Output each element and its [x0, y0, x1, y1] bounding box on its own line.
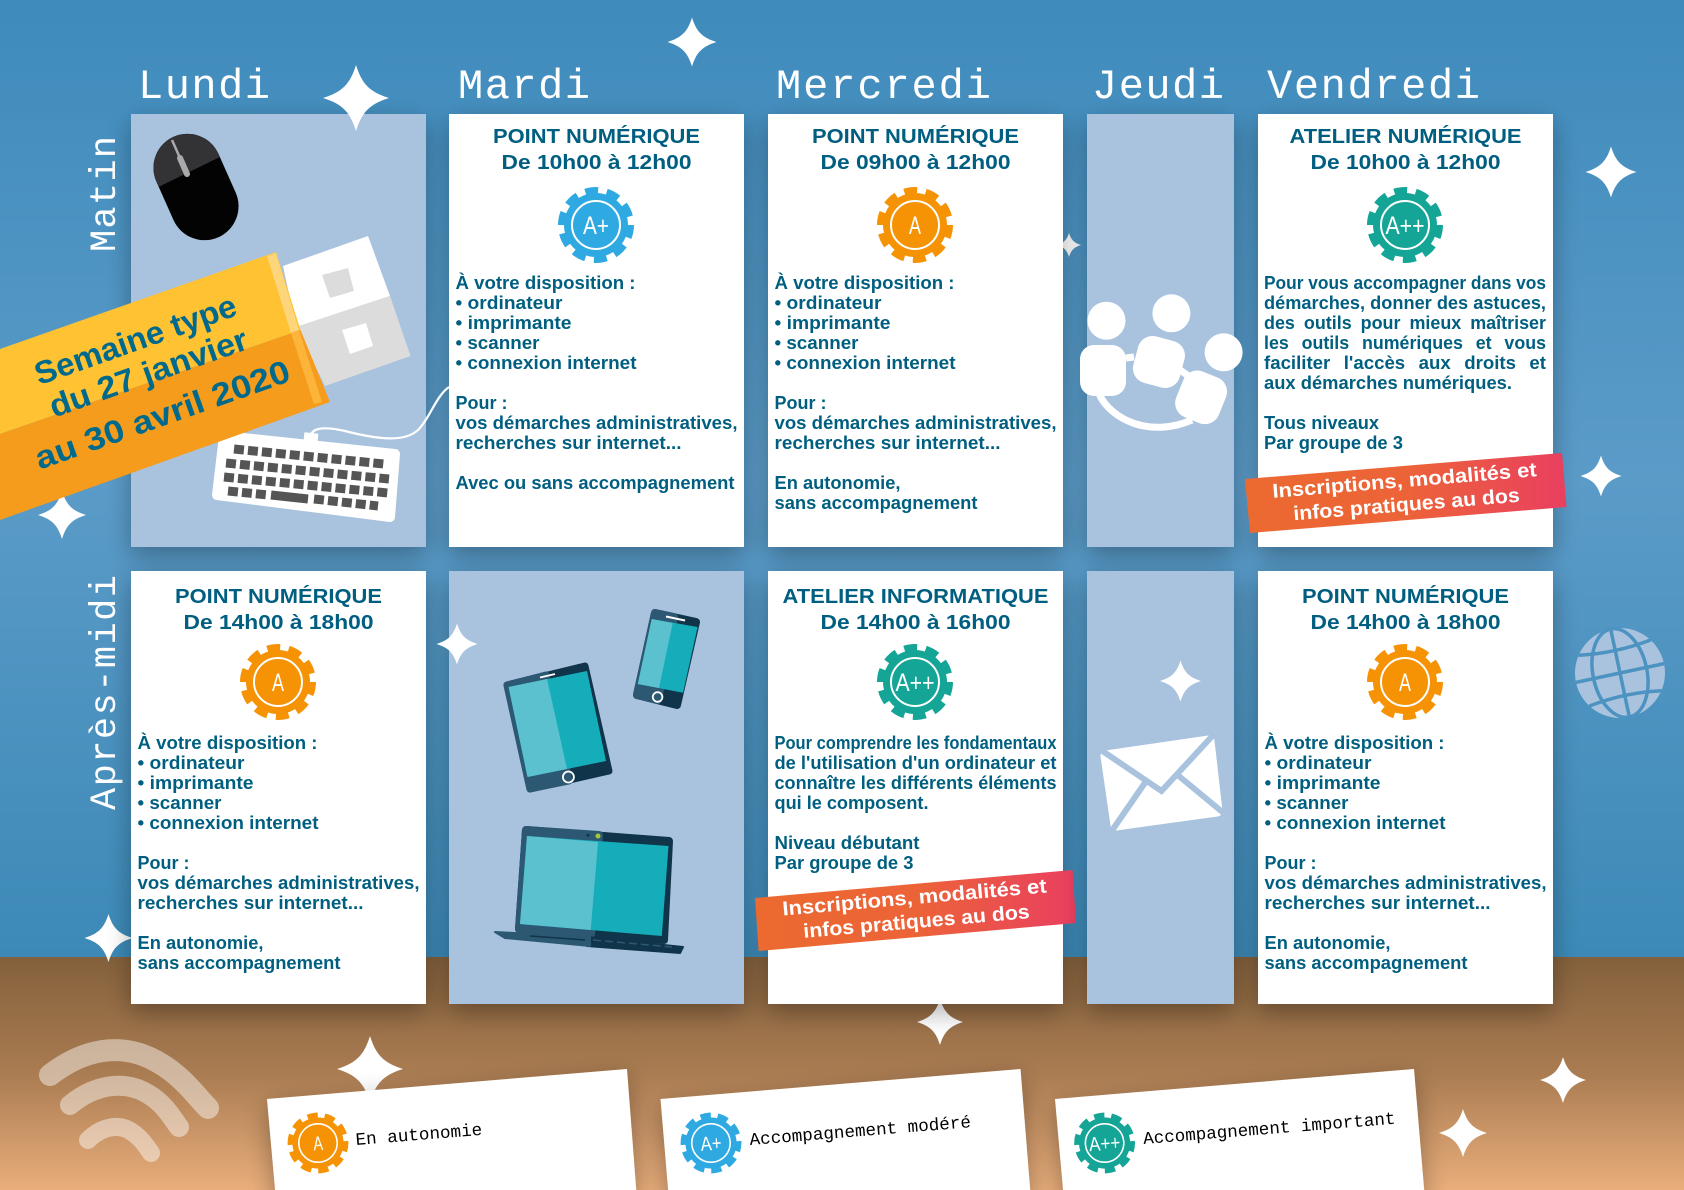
icon: gear A	[244, 648, 312, 716]
panel: Mercredi morning: POINT NUMÉRIQUE	[812, 125, 1019, 148]
panel: Vendredi afternoon	[1258, 571, 1553, 1004]
icon: gear A: A	[313, 1133, 324, 1156]
callout: Vendredi registration ribbon	[1245, 453, 1566, 533]
panel: Vendredi morning: aux démarches numériques.	[1264, 373, 1512, 393]
panel: Mardi morning: À votre disposition :	[456, 272, 636, 293]
panel: Vendredi afternoon: Pour :	[1264, 853, 1316, 873]
panel: Vendredi afternoon: POINT NUMÉRIQUE	[1302, 585, 1509, 608]
panel: Vendredi afternoon: recherches sur internet...	[1264, 893, 1490, 913]
panel: Mardi morning: POINT NUMÉRIQUE	[493, 125, 700, 148]
panel: Mercredi afternoon: De 14h00 à 16h00	[820, 611, 1010, 634]
panel: Mercredi morning: vos démarches administratives,	[774, 413, 1056, 433]
panel: Lundi afternoon: Pour :	[138, 853, 190, 873]
panel: Mercredi afternoon: connaître les différents éléments	[774, 773, 1056, 793]
panel: Lundi afternoon	[131, 571, 426, 1004]
callout: Mercredi registration ribbon: infos pratiques au dos	[802, 901, 1031, 943]
panel: Jeudi afternoon	[1087, 571, 1234, 1004]
panel: Lundi afternoon: • scanner	[138, 793, 222, 813]
icon: gear A+	[562, 191, 630, 259]
panel: Mardi morning: recherches sur internet...	[456, 433, 682, 453]
panel: Lundi afternoon: POINT NUMÉRIQUE	[175, 585, 382, 608]
panel: Lundi afternoon: De 14h00 à 18h00	[184, 611, 374, 634]
title banner: Semaine type: Semaine type	[29, 287, 241, 392]
panel: Lundi afternoon: • ordinateur	[138, 753, 244, 773]
icon: gear A++	[1371, 191, 1439, 259]
callout: Vendredi registration ribbon: infos pratiques au dos	[1292, 485, 1521, 525]
icon: globe	[1567, 620, 1673, 726]
title banner: Semaine type: au 30 avril 2020	[30, 353, 295, 476]
panel: Mercredi morning: Pour :	[774, 393, 826, 413]
panel: Vendredi afternoon: • imprimante	[1264, 773, 1380, 793]
panel: Vendredi morning: Par groupe de 3	[1264, 433, 1403, 453]
panel: Mardi morning: • ordinateur	[456, 293, 562, 313]
panel: Mardi morning: Pour :	[456, 393, 508, 413]
panel: Mardi morning: • scanner	[456, 333, 540, 353]
panel: Lundi afternoon: • imprimante	[138, 773, 254, 793]
panel: Mercredi morning: • connexion internet	[774, 353, 956, 373]
panel: Mercredi afternoon	[768, 571, 1063, 1004]
panel: Mardi morning: • connexion internet	[456, 353, 636, 373]
panel: Vendredi afternoon: • connexion internet	[1264, 813, 1446, 833]
panel: Vendredi morning: Tous niveaux	[1264, 413, 1379, 433]
panel: Mercredi afternoon: Pour comprendre les fondamentaux	[774, 733, 1056, 753]
panel: Vendredi afternoon: vos démarches administratives,	[1264, 873, 1546, 893]
callout: Mercredi registration ribbon: Inscriptions, modalités et	[782, 875, 1048, 921]
heading: days of the week: Vendredi	[1267, 63, 1480, 111]
star desk far right	[1439, 1109, 1487, 1157]
star over Jeudi panel	[1160, 660, 1201, 702]
icon: keyboard	[217, 387, 449, 517]
callout: Vendredi registration ribbon: Inscriptions, modalités et	[1272, 459, 1538, 503]
icon: gear A++: A++	[896, 669, 934, 697]
icon: gear A	[881, 191, 949, 259]
panel: Jeudi morning	[1087, 114, 1234, 547]
legend card: Accompagnement modéré: Accompagnement modéré	[749, 1113, 972, 1151]
heading: Matin: Matin	[85, 136, 127, 252]
heading: days of the week: Lundi	[138, 63, 270, 111]
panel: Mercredi morning: • scanner	[774, 333, 858, 353]
panel: Vendredi morning	[1258, 114, 1553, 547]
star left lower	[84, 914, 132, 962]
callout: Mercredi registration ribbon	[755, 870, 1076, 951]
panel: Mercredi afternoon: de l'utilisation d'un ordinateur et	[774, 753, 1056, 773]
panel: Lundi afternoon: En autonomie,	[138, 933, 264, 953]
icon: USB stick connector	[283, 236, 410, 386]
icon: laptop	[495, 830, 683, 953]
panel: Mercredi afternoon: qui le composent.	[774, 793, 928, 813]
star over Lundi panel	[323, 65, 389, 131]
legend card: Accompagnement important: Accompagnement important	[1142, 1110, 1396, 1150]
icon: gear A	[289, 1114, 347, 1172]
icon: gear A++: A++	[1386, 212, 1424, 240]
star left banner	[38, 491, 86, 539]
icon: gear A: A	[272, 669, 284, 697]
panel: Mardi afternoon with devices	[449, 571, 744, 1004]
star right middle	[1580, 456, 1622, 496]
panel: Mercredi morning: recherches sur internet...	[774, 433, 1000, 453]
heading: days of the week: Jeudi	[1092, 63, 1224, 111]
legend card: En autonomie	[267, 1069, 637, 1190]
panel: Lundi afternoon: vos démarches administratives,	[138, 873, 420, 893]
panel: Mardi morning: vos démarches administratives,	[456, 413, 738, 433]
heading: Après-midi: Après-midi	[85, 575, 127, 810]
panel: Mardi morning: De 10h00 à 12h00	[502, 151, 692, 174]
panel: Mardi morning: Avec ou sans accompagnement	[456, 473, 734, 493]
panel: Mercredi afternoon: Niveau débutant	[774, 833, 920, 853]
panel: Vendredi morning: démarches, donner des astuces,	[1264, 293, 1546, 313]
heading: days of the week	[138, 63, 1480, 111]
panel: Mardi morning	[449, 114, 744, 547]
legend card: Accompagnement modéré	[660, 1069, 1031, 1190]
icon: tablet	[507, 666, 609, 789]
panel: Mercredi morning: En autonomie,	[774, 473, 900, 493]
panel: Lundi afternoon: À votre disposition :	[138, 732, 318, 753]
icon: gear A++: A++	[1088, 1132, 1121, 1156]
background: brown desk	[0, 957, 1684, 1190]
star desk centre	[917, 999, 963, 1045]
icon: gear A++	[1076, 1114, 1134, 1172]
panel: Mercredi morning: sans accompagnement	[774, 493, 978, 513]
panel: Mercredi morning: De 09h00 à 12h00	[820, 151, 1010, 174]
star small between columns	[1057, 233, 1081, 257]
heading: days of the week: Mardi	[458, 63, 590, 111]
icon: smartphone	[637, 613, 698, 705]
panel: Vendredi afternoon: • ordinateur	[1264, 753, 1372, 773]
star desk left	[337, 1036, 403, 1102]
panel: Mercredi morning: • imprimante	[774, 313, 890, 333]
icon: wifi waves	[50, 1050, 208, 1153]
panel: Mercredi morning	[768, 114, 1063, 547]
icon: gear A+: A+	[700, 1132, 722, 1156]
panel: Vendredi morning: les outils numériques et vous	[1264, 333, 1546, 353]
star over Mardi panel	[436, 624, 478, 664]
panel: Lundi afternoon: sans accompagnement	[138, 953, 340, 973]
star right upper	[1586, 146, 1636, 198]
panel: Mercredi afternoon: Par groupe de 3	[774, 853, 914, 873]
heading: days of the week: Mercredi	[776, 63, 991, 111]
panel: Vendredi afternoon: • scanner	[1264, 793, 1348, 813]
icon: gear A: A	[909, 212, 921, 240]
panel: Vendredi afternoon: sans accompagnement	[1264, 953, 1468, 973]
panel: Vendredi afternoon: À votre disposition :	[1264, 732, 1444, 753]
panel: Vendredi morning: des outils pour mieux maîtriser	[1264, 313, 1546, 333]
icon: computer mouse	[153, 134, 239, 240]
title banner: Semaine type	[0, 252, 330, 520]
icon: gear A	[1371, 648, 1439, 716]
panel: Vendredi morning: faciliter l'accès aux droits et	[1264, 353, 1546, 373]
icon: gear A++	[881, 648, 949, 716]
icon: gear A+	[682, 1114, 740, 1172]
icon: gear A+: A+	[583, 212, 609, 240]
star top	[668, 18, 716, 66]
panel: Vendredi morning: De 10h00 à 12h00	[1310, 151, 1500, 174]
icon: envelope	[1098, 732, 1226, 832]
star desk right	[1540, 1057, 1586, 1103]
panel: Lundi afternoon: recherches sur internet...	[138, 893, 364, 913]
panel: Mardi morning: • imprimante	[456, 313, 572, 333]
panel: Lundi afternoon: • connexion internet	[138, 813, 318, 833]
panel: Mercredi morning: • ordinateur	[774, 293, 882, 313]
legend card: Accompagnement important	[1055, 1069, 1425, 1190]
title banner: Semaine type: du 27 janvier	[44, 321, 252, 424]
legend card: En autonomie: En autonomie	[355, 1121, 483, 1151]
icon: gear A: A	[1399, 669, 1411, 697]
panel: Vendredi afternoon: En autonomie,	[1264, 933, 1390, 953]
panel: Mercredi afternoon: ATELIER INFORMATIQUE	[782, 585, 1048, 608]
panel: Vendredi afternoon: De 14h00 à 18h00	[1310, 611, 1500, 634]
icon: group of people	[1080, 294, 1243, 429]
panel: Lundi morning background	[131, 114, 426, 547]
panel: Mercredi morning: À votre disposition :	[774, 272, 954, 293]
panel: Vendredi morning: Pour vous accompagner dans vos	[1264, 273, 1546, 293]
panel: Vendredi morning: ATELIER NUMÉRIQUE	[1290, 125, 1522, 148]
